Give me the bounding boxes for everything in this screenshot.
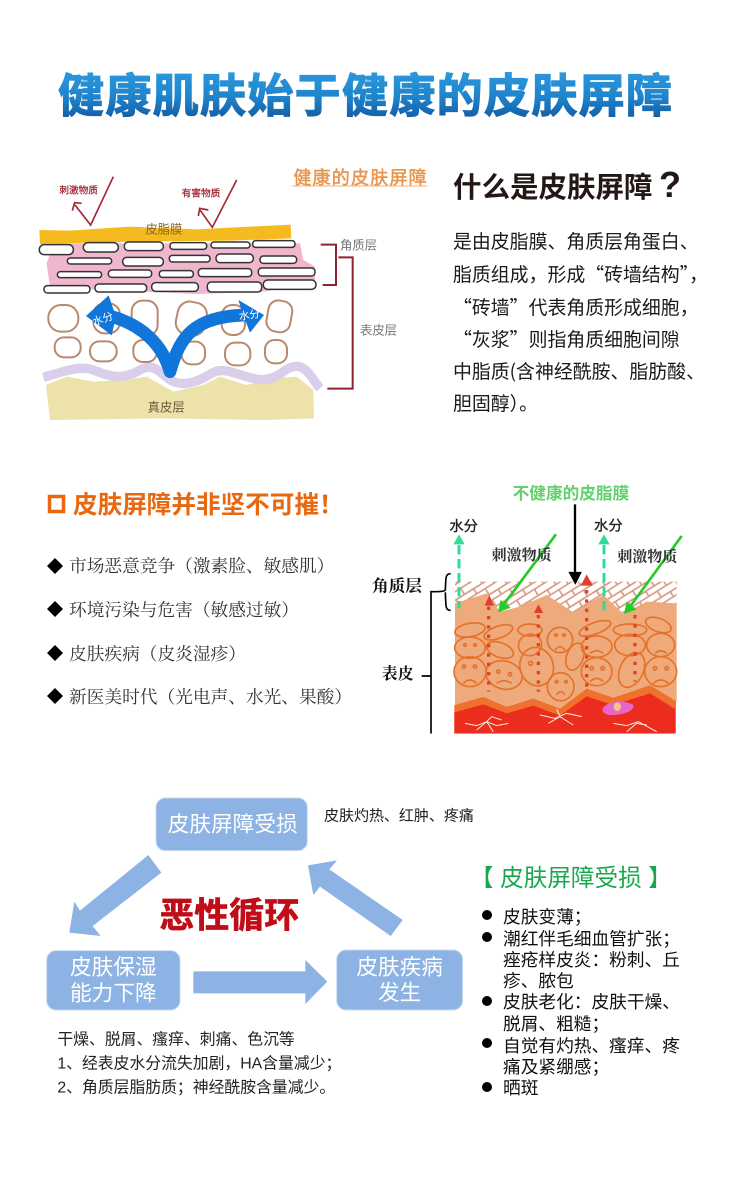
orange checkbox icon — [50, 496, 64, 512]
corneocyte bricks — [39, 241, 316, 293]
box: barrier damage: 皮肤屏障受损 — [168, 812, 298, 837]
brick pattern layer — [455, 582, 677, 618]
heading: 皮肤屏障并非坚不可摧！ — [73, 491, 344, 519]
symptoms note: 皮肤灼热、红肿、疼痛 — [324, 808, 474, 825]
green irritant arrows — [498, 534, 682, 614]
list text: 皮肤变薄； — [503, 907, 591, 927]
basement membrane — [43, 366, 320, 388]
dermis layer — [46, 377, 314, 420]
irritant arrows — [59, 177, 237, 227]
body text: 中脂质(含神经酰胺、脂肪酸、 — [453, 357, 705, 384]
panel: barrier damage symptoms — [470, 865, 680, 1098]
arrow: up-left — [308, 860, 403, 936]
labels: 角质层 — [372, 573, 423, 597]
irritant arrows: 有害物质 — [182, 188, 221, 200]
box: moisture decline — [47, 951, 180, 1010]
notes below diagram — [57, 1030, 341, 1096]
body text: “灰浆”则指角质细胞间隙 — [453, 325, 680, 352]
list text: 疹、脓包 — [503, 971, 574, 991]
box: moisture decline: 皮肤保湿 — [70, 954, 157, 979]
notes below diagram: 2、角质层脂肪质；神经酰胺含量减少。 — [57, 1078, 335, 1096]
labels: 刺激物质 — [617, 546, 677, 567]
dermis layer: 真皮层 — [148, 401, 185, 415]
heading: 【 皮肤屏障受损 】 — [470, 865, 672, 892]
labels: 水分 — [594, 518, 623, 535]
bullet list: 市场恶意竞争（激素脸、敏感肌） — [69, 553, 334, 578]
panel: what is the skin barrier — [453, 164, 708, 416]
title: 健康肌肤始于健康的皮肤屏障 — [58, 70, 672, 122]
arrow: down-left — [69, 855, 161, 936]
water arrows: 水分 — [238, 308, 261, 323]
labels: 表皮 — [382, 661, 414, 684]
black brackets — [422, 574, 451, 734]
stratum and epidermis skin — [455, 593, 677, 708]
layer brackets — [321, 238, 397, 389]
labels: 水分 — [449, 518, 478, 535]
list text: 自觉有灼热、瘙痒、疼 — [503, 1036, 680, 1056]
box: skin disease: 皮肤疾病 — [356, 954, 443, 979]
body text: 脂质组成，形成“砖墙结构”， — [453, 260, 708, 287]
body text — [453, 227, 708, 416]
list text: 皮肤老化：皮肤干燥、 — [503, 992, 680, 1012]
sad cells — [454, 614, 677, 701]
body text: “砖墙”代表角质形成细胞， — [453, 293, 699, 320]
notes below diagram: 干燥、脱屑、瘙痒、刺痛、色沉等 — [57, 1030, 295, 1048]
bullet list: 新医美时代（光电声、水光、果酸） — [69, 684, 352, 709]
layer brackets: 表皮层 — [360, 323, 397, 337]
illustration title: 健康的皮肤屏障 — [293, 168, 427, 188]
heading: 什么是皮肤屏障 — [453, 172, 653, 204]
center label: 恶性循环 — [159, 897, 299, 936]
layer brackets: 角质层 — [340, 238, 377, 252]
black sebum arrow — [570, 504, 580, 582]
irritant arrows: 刺激物质 — [59, 184, 98, 196]
panel: unhealthy sebum film illustration — [372, 483, 682, 734]
list text: 痛及紧绷感； — [503, 1057, 609, 1077]
epidermal cells — [48, 299, 294, 365]
panel: healthy skin barrier illustration — [39, 168, 427, 420]
bullet list: 皮肤疾病（皮炎湿疹） — [69, 641, 246, 666]
water arrows — [86, 295, 264, 372]
illustration title: 不健康的皮脂膜 — [513, 483, 630, 503]
body text: 是由皮脂膜、角质层角蛋白、 — [453, 227, 699, 254]
bullet list: 环境污染与危害（敏感过敏） — [69, 597, 299, 622]
box: barrier damage — [156, 798, 307, 851]
lipid matrix — [47, 243, 315, 294]
red dermis — [454, 685, 676, 734]
pink lesion — [602, 702, 633, 715]
list text: 晒斑 — [503, 1078, 538, 1098]
question mark: ? — [659, 164, 681, 205]
sebum film: 皮脂膜 — [145, 221, 182, 236]
box: skin disease — [337, 950, 463, 1010]
sebum film — [39, 221, 291, 244]
bullets — [482, 910, 492, 1092]
panel: vicious cycle diagram — [47, 798, 474, 1096]
list text: 脱屑、粗糙； — [503, 1014, 609, 1034]
water arrows: 水分 — [91, 310, 115, 329]
notes below diagram: 1、经表皮水分流失加剧，HA含量减少； — [57, 1054, 341, 1072]
list text: 痤疮样皮炎：粉刺、丘 — [503, 950, 680, 970]
capillaries — [465, 709, 657, 732]
list text: 潮红伴毛细血管扩张； — [503, 929, 680, 949]
panel: barrier is not indestructible — [47, 491, 352, 709]
red dotted irritant paths — [485, 574, 635, 692]
labels: 刺激物质 — [492, 544, 552, 565]
body text: 胆固醇）。 — [453, 389, 538, 416]
bullet list — [47, 553, 352, 709]
list text — [503, 907, 680, 1098]
labels — [372, 518, 677, 684]
arrow: right — [193, 960, 327, 1004]
box: moisture decline: 能力下降 — [70, 981, 157, 1006]
box: skin disease: 发生 — [378, 980, 421, 1005]
green water loss arrows — [453, 534, 610, 613]
